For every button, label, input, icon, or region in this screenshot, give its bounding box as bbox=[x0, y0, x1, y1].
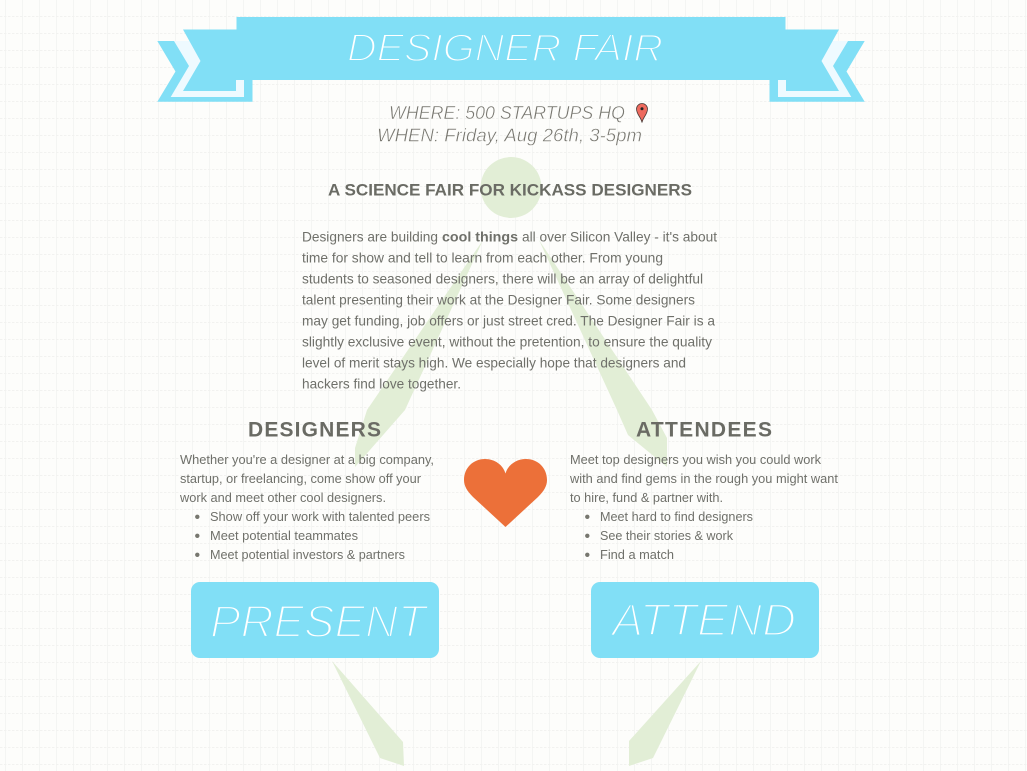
attendees bullet list: Meet hard to find designers bbox=[600, 509, 753, 524]
intro paragraph: students to seasoned designers, there will be an array of delightful bbox=[302, 270, 703, 286]
designers description: Whether you're a designer at a big company, bbox=[180, 452, 434, 467]
attendees bullet list: Find a match bbox=[600, 547, 674, 562]
attendees bullet list bbox=[585, 509, 753, 562]
intro paragraph: time for show and tell to learn from each other. From young bbox=[302, 250, 663, 266]
heading: attendees: ATTENDEES bbox=[636, 419, 772, 442]
attendees description: with and find gems in the rough you might want bbox=[569, 471, 838, 486]
intro paragraph: talent presenting their work at the Designer Fair. Some designers bbox=[302, 292, 695, 308]
intro paragraph: all over Silicon Valley - it's about bbox=[522, 228, 717, 244]
button: attend: ATTEND bbox=[609, 595, 796, 646]
banner ribbon bbox=[157, 17, 865, 102]
attendees description: Meet top designers you wish you could work bbox=[570, 452, 821, 467]
designers bullet list: Meet potential investors & partners bbox=[210, 547, 405, 562]
attendees description bbox=[569, 452, 838, 505]
heading: designers: DESIGNERS bbox=[248, 419, 381, 442]
designers bullet list bbox=[195, 509, 430, 562]
intro paragraph bbox=[302, 228, 717, 392]
designers description bbox=[179, 452, 434, 505]
intro paragraph: hackers find love together. bbox=[302, 376, 461, 392]
intro paragraph: slightly exclusive event, without the pretention, to ensure the quality bbox=[302, 334, 712, 350]
event where and when bbox=[377, 103, 642, 146]
designers bullet list: Meet potential teammates bbox=[210, 528, 358, 543]
button: present bbox=[191, 582, 439, 658]
intro paragraph: cool things bbox=[442, 228, 518, 244]
icon: map pin bbox=[636, 104, 648, 122]
title: DESIGNER FAIR bbox=[347, 27, 663, 70]
icon: heart bbox=[464, 459, 547, 527]
background diagram: green circle and legs bbox=[332, 157, 701, 766]
panel: designers bbox=[179, 419, 439, 658]
intro paragraph: may get funding, job offers or just street cred. The Designer Fair is a bbox=[302, 312, 715, 328]
designers bullet list: Show off your work with talented peers bbox=[210, 509, 430, 524]
intro paragraph: Designers are building bbox=[302, 228, 438, 244]
attendees description: to hire, fund & partner with. bbox=[570, 490, 723, 505]
designers description: work and meet other cool designers. bbox=[179, 490, 386, 505]
designers description: startup, or freelancing, come show off your bbox=[180, 471, 422, 486]
button: present: PRESENT bbox=[210, 596, 430, 647]
event where and when: WHERE: 500 STARTUPS HQ bbox=[389, 103, 625, 123]
panel: attendees bbox=[569, 419, 838, 658]
button: attend bbox=[591, 582, 819, 658]
event where and when: WHEN: Friday, Aug 26th, 3-5pm bbox=[377, 126, 642, 146]
heading: science fair: A SCIENCE FAIR FOR KICKASS DESIGNERS bbox=[328, 181, 692, 200]
intro paragraph: level of merit stays high. We especially hope that designers and bbox=[302, 354, 686, 370]
attendees bullet list: See their stories & work bbox=[600, 528, 733, 543]
